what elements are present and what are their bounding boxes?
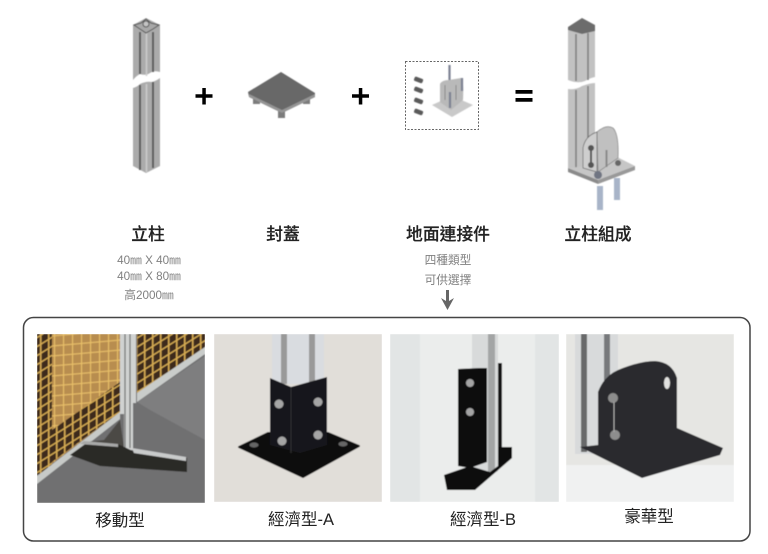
caption: mobile type: 移動型 <box>95 511 145 530</box>
arrow: down to options <box>441 290 454 310</box>
panel: connector types <box>24 318 750 541</box>
photo: economy type A <box>214 334 382 502</box>
note: four types available: 四種類型 <box>425 253 472 267</box>
heading: assembled column: 立柱組成 <box>564 225 632 244</box>
dashed frame <box>406 62 478 130</box>
heading: floor connector: 地面連接件 <box>406 225 490 244</box>
column specifications: 高2000㎜ <box>124 288 174 302</box>
caption: economy type A: 經濟型-A <box>268 510 334 529</box>
photo: mobile type <box>37 334 205 503</box>
heading: end cap: 封蓋 <box>266 225 300 244</box>
icon: assembled column <box>568 18 635 210</box>
caption: deluxe type: 豪華型 <box>624 506 674 526</box>
heading: column: 立柱 <box>131 225 165 244</box>
bolts <box>414 76 424 116</box>
column specifications: 40㎜ X 40㎜ <box>117 254 181 267</box>
photo: economy type B <box>390 334 559 502</box>
icon: plus sign <box>352 88 369 104</box>
column specifications <box>117 254 181 302</box>
note: four types available: 可供選擇 <box>425 273 472 287</box>
caption: economy type B: 經濟型-B <box>450 510 516 529</box>
icon: aluminium column <box>133 18 160 173</box>
icon: end cap <box>248 72 315 118</box>
icon: plus sign <box>196 88 212 104</box>
note: four types available <box>425 253 472 287</box>
bracket <box>432 65 473 117</box>
photo: deluxe type <box>566 334 734 502</box>
icon: equals sign <box>516 90 532 102</box>
column specifications: 40㎜ X 80㎜ <box>117 270 181 283</box>
icon: floor connector kit <box>406 62 478 130</box>
